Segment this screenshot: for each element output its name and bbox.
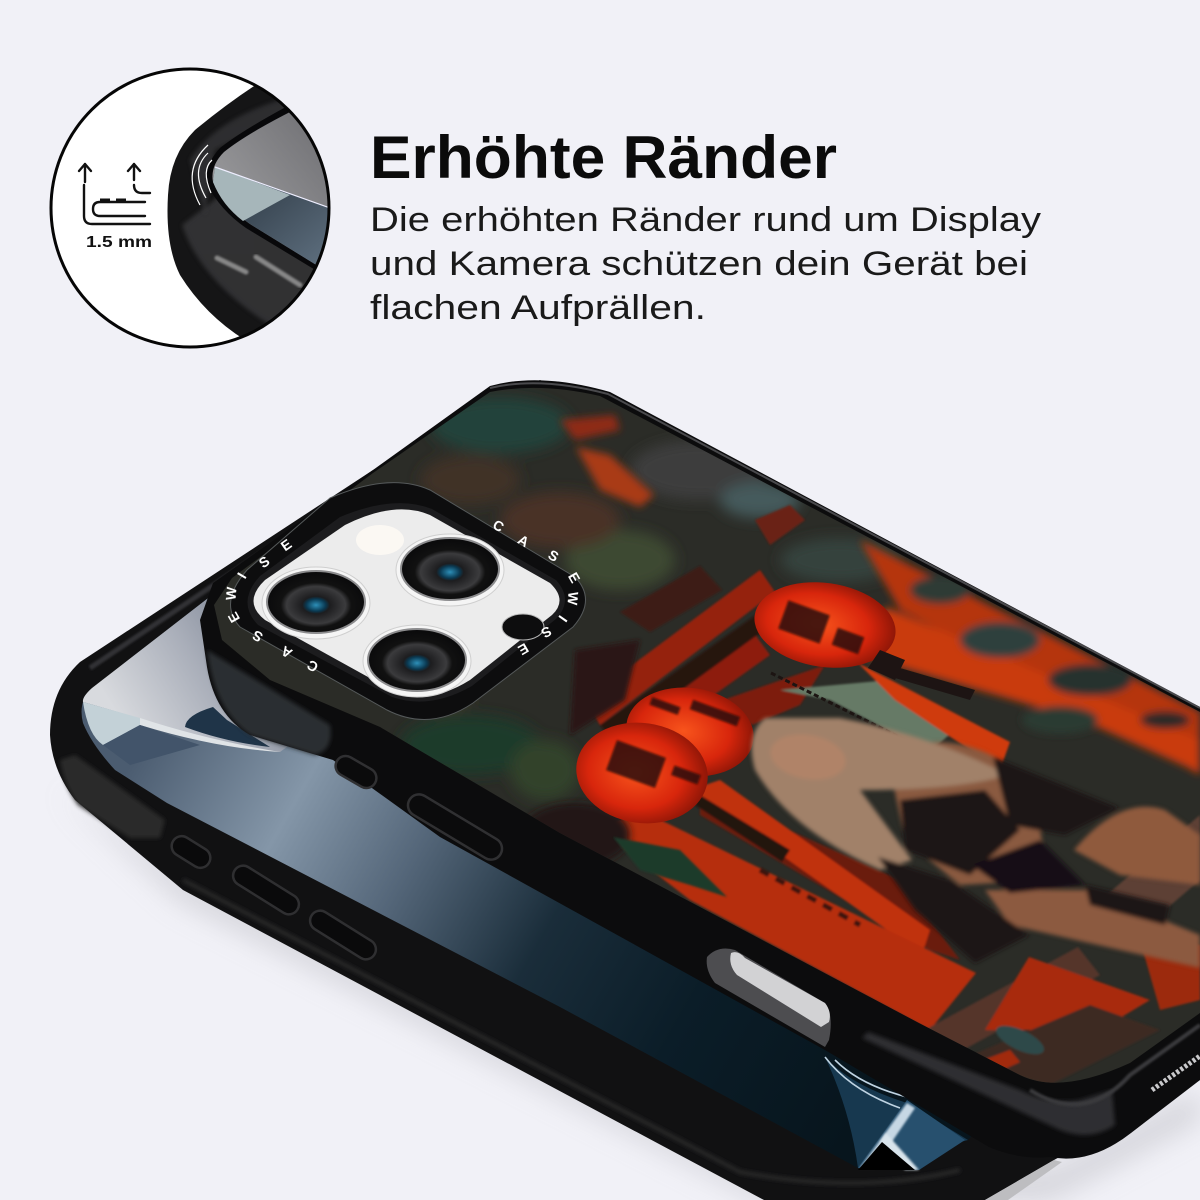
lidar sensor xyxy=(502,614,544,640)
brand ring lettering: C xyxy=(490,516,507,535)
face xyxy=(770,734,846,780)
brand ring lettering: W xyxy=(564,591,582,606)
icon: 1.5 mm raised lip diagram xyxy=(79,164,150,224)
text block: description xyxy=(370,201,1041,327)
text block: description: und Kamera schützen dein Gerät bei xyxy=(370,245,1028,283)
foliage, upper area xyxy=(400,397,900,800)
brand ring lettering: E xyxy=(515,640,532,659)
brand ring lettering: E xyxy=(278,536,295,554)
inner lip xyxy=(247,503,565,702)
lower red beams xyxy=(600,780,1200,1085)
lower phone bezel xyxy=(50,380,1200,1200)
brand ring lettering: S xyxy=(538,623,555,642)
text block: description: flachen Aufprällen. xyxy=(370,289,706,327)
torso, abstract warm tone xyxy=(886,742,1050,885)
label: 1.5 mm: 1.5 mm xyxy=(86,234,152,251)
brand ring lettering: S xyxy=(545,546,562,565)
dark floral robe xyxy=(993,757,1119,835)
top edge red beam with leaves xyxy=(560,415,1200,775)
screen reflection xyxy=(83,585,350,765)
camera plate xyxy=(254,509,560,696)
lens: left xyxy=(262,567,370,639)
lanterns xyxy=(570,574,975,832)
brand ring lettering: I xyxy=(555,613,571,625)
bump panel near camera xyxy=(207,650,331,755)
long hair xyxy=(752,718,1008,870)
wallpaper glow at bottom of screen xyxy=(825,1057,968,1170)
brand ring lettering: S xyxy=(249,627,266,646)
printed photo xyxy=(200,370,1200,1100)
lower phone silver edge xyxy=(985,1160,1062,1200)
brand ring lettering: E xyxy=(565,569,584,586)
stylised figure, abstracted xyxy=(752,718,1200,968)
soft shadow under phones xyxy=(60,790,1200,1200)
brand ring lettering xyxy=(222,516,584,676)
lower phone, screen facing up xyxy=(50,380,1200,1200)
text block: description: Die erhöhten Ränder rund um Display xyxy=(370,201,1041,239)
title: Erhöhte Ränder xyxy=(370,124,837,191)
camera island xyxy=(222,483,586,719)
charging port xyxy=(707,949,831,1047)
upper phone, back with printed case xyxy=(200,370,1200,1159)
bump panel near case bottom corner xyxy=(862,1032,1115,1135)
brand ring lettering: A xyxy=(515,531,532,550)
flash xyxy=(356,525,404,555)
case side buttons xyxy=(332,752,506,864)
lower phone screen xyxy=(82,500,1100,1168)
island bumper xyxy=(231,483,586,719)
brand ring lettering: I xyxy=(234,570,250,581)
brand ring lettering: W xyxy=(222,586,240,601)
legs, abstract warm tone xyxy=(1074,807,1200,885)
brand ring lettering: S xyxy=(256,553,273,571)
side buttons xyxy=(168,832,380,963)
dark foliage at left of beam xyxy=(520,640,727,897)
brand ring lettering: E xyxy=(224,609,243,626)
phone corner close-up xyxy=(168,86,328,336)
torii shrine beams xyxy=(585,505,1010,770)
case body xyxy=(200,380,1200,1159)
lens: bottom xyxy=(363,625,471,697)
brand ring lettering: A xyxy=(278,643,295,662)
callout: raised edge detail circle xyxy=(51,69,340,347)
speaker grille xyxy=(1152,1056,1200,1090)
brand ring lettering: C xyxy=(304,657,321,676)
lens: right xyxy=(396,534,504,606)
